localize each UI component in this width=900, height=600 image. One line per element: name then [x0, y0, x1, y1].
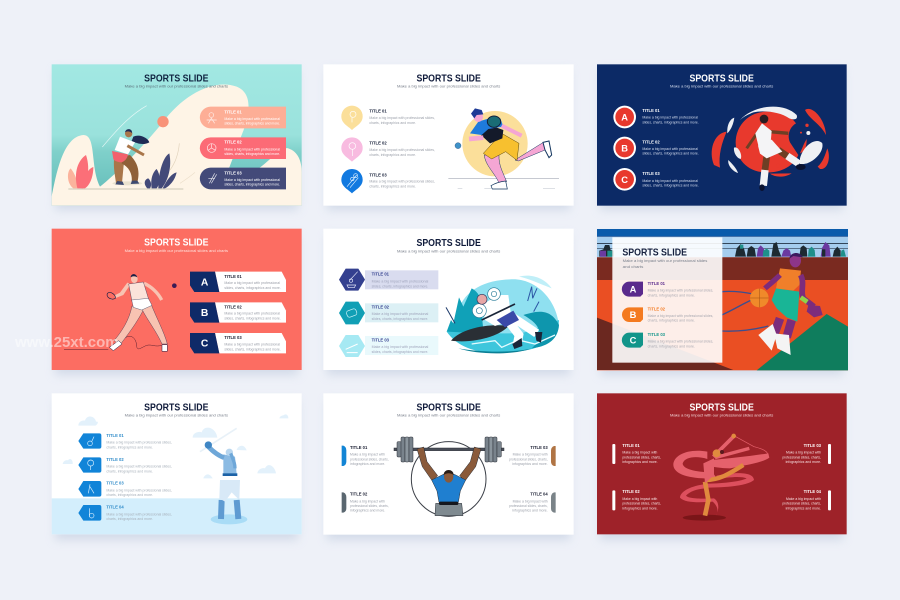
item 1 tag: Make a big impact with professional slides,: [106, 441, 172, 445]
item 3 hex row: slides, charts, infographics and more.: [372, 350, 428, 354]
item B banner: slides, charts, infographics and more.: [224, 317, 281, 321]
item B banner: TITLE 02: [224, 304, 242, 309]
kayak: [451, 325, 508, 341]
item 4: [509, 492, 556, 513]
item 1 pill: Make a big impact with professional: [224, 117, 280, 121]
item C: TITLE 03: [648, 332, 666, 337]
item A: Make a big impact with professional slides,: [648, 289, 713, 293]
heading: SPORTS SLIDE: [622, 248, 688, 259]
item 3: infographics and more.: [786, 460, 821, 464]
item 4: TITLE 04: [804, 489, 822, 494]
item 3 tag: TITLE 03: [106, 481, 124, 486]
item 4 tag: Make a big impact with professional slides,: [106, 512, 172, 516]
item A banner: Make a big impact with professional: [224, 281, 280, 285]
item 1 tag: charts, infographics and more.: [106, 445, 153, 449]
item 1 pill: slides, charts, infographics and more.: [224, 122, 280, 126]
item B: slides, charts, infographics and more.: [642, 152, 699, 156]
item C: Make a big impact with professional: [642, 179, 698, 183]
item 1: professional slides, charts,: [622, 455, 661, 459]
item 3: professional slides, charts,: [509, 457, 548, 461]
item 1 pin: [341, 106, 435, 130]
item 2: professional slides, charts,: [622, 502, 661, 506]
item 1 pill: [200, 107, 286, 128]
translucent text panel: [612, 237, 722, 363]
player: football: [747, 115, 806, 191]
yellow circle backdrop: [462, 111, 528, 176]
subheading: and charts: [623, 264, 643, 269]
arena wall: [597, 257, 848, 280]
item C: charts, infographics and more.: [648, 344, 695, 348]
kayaker: [472, 288, 542, 349]
item 2 pill: slides, charts, infographics and more.: [224, 152, 280, 156]
item 2 tag: charts, infographics and more.: [106, 469, 153, 473]
item B banner: B: [201, 308, 208, 319]
subheading: Make a big impact with our professional slides and charts: [397, 414, 500, 418]
illustration: red splash and white strokes: [712, 107, 829, 177]
item 2: [342, 492, 389, 513]
volleyball: [157, 116, 169, 127]
item 2 pill: TITLE 02: [224, 140, 242, 145]
item 3 hex row: [339, 335, 438, 357]
item 3 pin: TITLE 03: [369, 172, 387, 177]
ground and squiggle: [64, 336, 162, 350]
ground band: [52, 498, 302, 534]
item 3 hex row: TITLE 03: [372, 337, 390, 342]
item 2 pin: [341, 137, 435, 162]
player: volleyball: [112, 129, 149, 185]
ball: [172, 283, 177, 288]
item 3: professional slides, charts,: [782, 455, 821, 459]
floor shadow: [683, 515, 726, 521]
item 4: infographics and more.: [512, 509, 548, 513]
item 1: TITLE 01: [350, 445, 368, 450]
item A: slides, charts, infographics and more.: [642, 120, 699, 124]
icon: figure: [207, 113, 217, 123]
item 3: [782, 443, 831, 464]
subheading: [623, 258, 707, 269]
item C: C: [621, 175, 628, 185]
item 3 pin: Make a big impact with professional slides,: [369, 180, 435, 184]
item 2 hex row: [339, 302, 438, 324]
gymnast and ribbon: [673, 434, 769, 516]
item C: C: [630, 336, 637, 346]
subheading: Make a big impact with our professional slides and charts: [397, 249, 500, 253]
panel: slide 3 navy football: [597, 64, 847, 210]
stadium sky and top band: [597, 229, 848, 257]
item 3 pin: [341, 169, 435, 193]
item B: [613, 137, 699, 159]
item C banner: Make a big impact with professional: [224, 342, 280, 346]
item 3: [509, 445, 556, 466]
item C banner: [190, 333, 286, 353]
crowd silhouettes: [599, 242, 846, 257]
subheading: Make a big impact with our professional slides: [623, 258, 707, 263]
subheading: Make a big impact with our professional slides and charts: [125, 249, 228, 253]
item 1: infographics and more.: [350, 462, 385, 466]
item C banner: slides, charts, infographics and more.: [224, 347, 281, 351]
item B banner: [190, 302, 286, 323]
item A: [613, 106, 699, 128]
item 2: infographics and more.: [350, 509, 385, 513]
item 2: Make a big impact with: [350, 499, 385, 503]
item B: Make a big impact with professional slides,: [648, 314, 713, 318]
icon: ball: [207, 144, 216, 152]
item 4: TITLE 04: [530, 492, 548, 497]
item C: [613, 168, 699, 191]
item B: charts, infographics and more.: [648, 319, 695, 323]
item 3: TITLE 03: [804, 443, 822, 448]
item B: [622, 306, 713, 323]
subheading: Make a big impact with our professional slides and charts: [125, 414, 228, 418]
item 2 hex row: TITLE 02: [372, 304, 390, 309]
item 2: infographics and more.: [622, 506, 658, 510]
panel: slide 9 red gymnastics: [597, 393, 847, 540]
weightlifter: [417, 447, 481, 516]
item 2 pin: Make a big impact with professional slides,: [369, 148, 435, 152]
ground line: [68, 188, 183, 190]
item 3 tag: charts, infographics and more.: [106, 493, 153, 497]
panel: slide 6 basketball: [597, 229, 848, 375]
item 4 tag: TITLE 04: [106, 505, 124, 510]
item A banner: slides, charts, infographics and more.: [224, 286, 281, 290]
item A: TITLE 01: [642, 108, 660, 113]
player: basketball: [750, 253, 823, 355]
item 1 hex row: TITLE 01: [372, 272, 390, 277]
cream background blobs: [52, 85, 302, 206]
item 1 pin: charts, infographics and more.: [369, 121, 416, 125]
item A: A: [630, 285, 637, 295]
court lines: [722, 291, 768, 331]
item B: B: [630, 310, 637, 320]
plant: navy: [145, 153, 177, 188]
item 1: [342, 445, 389, 466]
watermark: www.25xt.com: [14, 334, 119, 351]
item 1: Make a big impact with: [622, 451, 657, 455]
ground line: [448, 177, 559, 180]
item 2: Make a big impact with: [622, 497, 657, 501]
item 4: [782, 489, 831, 510]
subheading: Make a big impact with our professional slides and charts: [670, 414, 773, 418]
item A banner: [190, 272, 286, 292]
item 2 hex row: Make a big impact with professional: [372, 312, 429, 316]
item 1: [612, 443, 661, 464]
item B: TITLE 02: [648, 306, 666, 311]
item 3: TITLE 03: [530, 445, 548, 450]
item 3 tag: [78, 481, 172, 497]
ground shadow: [211, 514, 247, 524]
item 1: professional slides, charts,: [350, 457, 389, 461]
item 4 tag: charts, infographics and more.: [106, 517, 153, 521]
plant: coral: [68, 155, 93, 188]
item A: A: [621, 113, 628, 123]
heading: SPORTS SLIDE: [144, 238, 209, 249]
item 4: infographics and more.: [786, 506, 821, 510]
item 1 hex row: Make a big impact with professional: [372, 279, 429, 283]
item C: TITLE 03: [642, 171, 660, 176]
panel: slide 2 white table tennis: [323, 64, 574, 210]
item 1: Make a big impact with: [350, 453, 385, 457]
item 1 hex row: slides, charts, infographics and more.: [372, 284, 428, 288]
item 1 tag: TITLE 01: [106, 433, 124, 438]
item 3 hex row: Make a big impact with professional: [372, 345, 429, 349]
item 1 pill: TITLE 01: [224, 109, 242, 114]
heading: SPORTS SLIDE: [689, 402, 754, 413]
item 3 tag: Make a big impact with professional slides,: [106, 488, 172, 492]
item C banner: TITLE 03: [224, 335, 242, 340]
golfer: [200, 428, 240, 519]
item A: [622, 281, 713, 297]
item C: [622, 332, 713, 348]
item 3 pill: [200, 168, 286, 189]
court shapes: [597, 314, 848, 370]
item A banner: A: [201, 277, 209, 288]
item 2: TITLE 02: [622, 489, 640, 494]
panel: slide 4 coral tennis: [52, 229, 302, 375]
subheading: Make a big impact with our professional slides and charts: [125, 85, 228, 89]
subheading: Make a big impact with our professional slides and charts: [670, 85, 773, 89]
item 3 pill: Make a big impact with professional: [224, 178, 280, 182]
item 4: professional slides, charts,: [509, 504, 548, 508]
panel: slide 5 white kayak: [323, 229, 574, 375]
heading: SPORTS SLIDE: [416, 238, 481, 249]
item 2 tag: TITLE 02: [106, 457, 124, 462]
item B: TITLE 02: [642, 139, 660, 144]
item 1 tag: [78, 433, 172, 449]
heading: SPORTS SLIDE: [144, 74, 209, 85]
item 2: [612, 489, 661, 510]
item 2 hex row: slides, charts, infographics and more.: [372, 317, 428, 321]
item C banner: C: [201, 339, 209, 350]
heading: SPORTS SLIDE: [144, 402, 209, 413]
heading: SPORTS SLIDE: [689, 74, 754, 85]
item A: charts, infographics and more.: [648, 293, 695, 297]
panel: slide 7 blue golf: [52, 393, 302, 540]
item 4: Make a big impact with: [513, 499, 548, 503]
item 1 hex row: [339, 269, 438, 291]
item 2: professional slides, charts,: [350, 504, 389, 508]
barbell: [394, 437, 504, 462]
item 3 pin: charts, infographics and more.: [369, 185, 416, 189]
clouds: [63, 414, 288, 478]
item A banner: TITLE 01: [224, 274, 242, 279]
item 3 pill: TITLE 03: [224, 170, 242, 175]
player: table tennis: [469, 108, 552, 189]
item 2: TITLE 02: [350, 492, 368, 497]
illustration: water blob: [446, 276, 559, 353]
icon: racket: [208, 173, 217, 183]
item 3: Make a big impact with: [786, 451, 821, 455]
item 1 pin: TITLE 01: [369, 109, 387, 114]
item A: Make a big impact with professional: [642, 116, 698, 120]
ring: [411, 442, 486, 516]
panel: slide 8 white weightlifter: [323, 393, 574, 540]
player: tennis: [107, 274, 167, 351]
item 3: infographics and more.: [512, 462, 548, 466]
item 1: TITLE 01: [622, 443, 640, 448]
item B: B: [621, 144, 628, 154]
item 4: Make a big impact with: [786, 497, 821, 501]
item 2 pill: [200, 137, 286, 159]
item 4 tag: [78, 505, 172, 521]
item 1 pin: Make a big impact with professional slides,: [369, 116, 435, 120]
item 2 tag: Make a big impact with professional slides,: [106, 465, 172, 469]
item B: Make a big impact with professional: [642, 147, 698, 151]
item 3 pill: slides, charts, infographics and more.: [224, 183, 280, 187]
item 4: professional slides, charts,: [782, 502, 821, 506]
ball: [455, 143, 461, 149]
heading: SPORTS SLIDE: [416, 402, 481, 413]
item C: Make a big impact with professional slides,: [648, 340, 713, 344]
curved motion lines: [102, 106, 195, 183]
item B banner: Make a big impact with professional: [224, 312, 280, 316]
item 2 pin: charts, infographics and more.: [369, 153, 416, 157]
item C: slides, charts, infographics and more.: [642, 184, 699, 188]
heading: SPORTS SLIDE: [416, 74, 481, 85]
item 2 tag: [78, 457, 172, 473]
item 2 pin: TITLE 02: [369, 141, 387, 146]
item 3: Make a big impact with: [513, 453, 548, 457]
panel: slide 1 teal volleyball: [52, 64, 302, 210]
item 2 pill: Make a big impact with professional: [224, 147, 280, 151]
subheading: Make a big impact with our professional slides and charts: [397, 85, 500, 89]
item A: TITLE 01: [648, 281, 666, 286]
item 1: infographics and more.: [622, 460, 658, 464]
